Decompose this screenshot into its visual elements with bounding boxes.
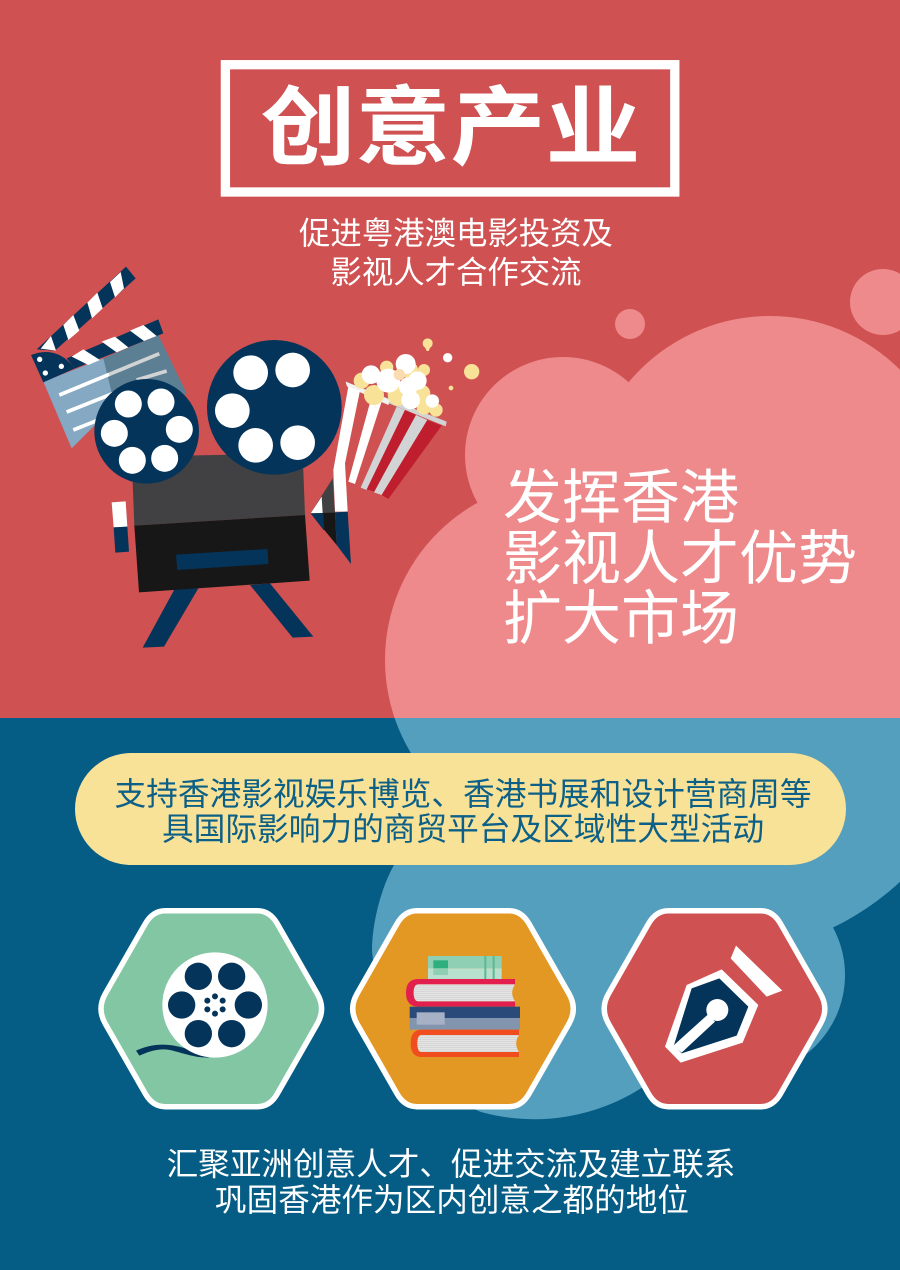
big slogan: 扩大市场 bbox=[503, 586, 739, 652]
big slogan bbox=[503, 465, 857, 652]
yellow pill callout bbox=[75, 753, 846, 865]
hexagon icon: books bbox=[353, 911, 573, 1107]
icon: projector lens bbox=[311, 478, 351, 564]
pink cloud bbox=[385, 269, 900, 718]
bottom blue background bbox=[0, 718, 900, 1270]
illustration: film projector, clapperboard, popcorn bbox=[31, 267, 479, 648]
big slogan: 发挥香港 bbox=[503, 465, 739, 531]
icon: small film reel bbox=[94, 379, 199, 484]
icon: projector body bbox=[132, 453, 310, 592]
yellow pill callout: 支持香港影视娱乐博览、香港书展和设计营商周等 bbox=[114, 776, 812, 812]
bottom caption bbox=[167, 1146, 735, 1218]
title: 创意产业 bbox=[261, 81, 640, 176]
icon: projector side tab bbox=[112, 501, 129, 553]
icon: large film reel bbox=[207, 340, 342, 475]
icon: popcorn bbox=[333, 338, 479, 512]
yellow pill callout: 具国际影响力的商贸平台及区域性大型活动 bbox=[162, 811, 764, 847]
subtitle: 促进粤港澳电影投资及 bbox=[299, 216, 613, 251]
icon: projector legs bbox=[143, 583, 313, 648]
hexagon icon: film reel bbox=[101, 911, 322, 1107]
title box bbox=[225, 65, 675, 192]
big slogan: 影视人才优势 bbox=[503, 526, 857, 592]
top red background bbox=[0, 0, 900, 718]
light blue cloud bbox=[372, 718, 900, 1120]
bottom caption: 巩固香港作为区内创意之都的地位 bbox=[215, 1182, 689, 1218]
bottom caption: 汇聚亚洲创意人才、促进交流及建立联系 bbox=[167, 1146, 735, 1182]
subtitle: 影视人才合作交流 bbox=[330, 255, 582, 290]
subtitle bbox=[299, 216, 613, 290]
hexagon icon: pen nib bbox=[604, 911, 825, 1107]
icon: clapperboard bbox=[31, 267, 187, 448]
